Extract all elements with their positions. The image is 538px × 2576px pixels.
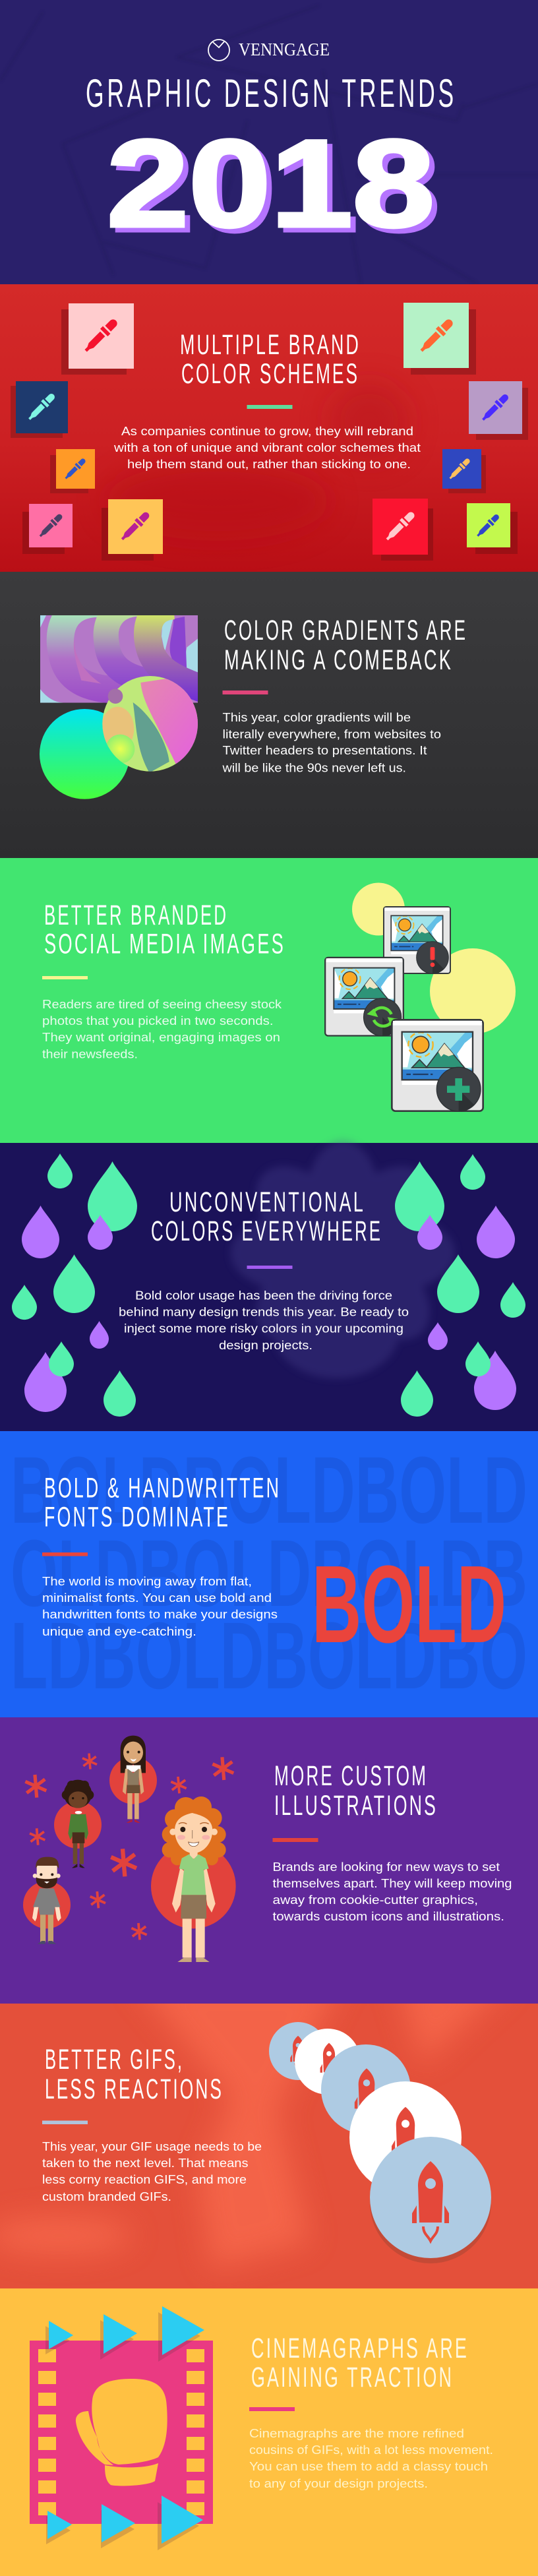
body text: cousins of GIFs, with a lot less movement. [249,2443,493,2457]
card: navy dropper [11,381,68,438]
body text [273,1860,512,1923]
heading: BOLD & HANDWRITTEN [44,1472,281,1504]
person: man with beard [23,1857,71,1944]
heading [44,1472,281,1533]
icon: play triangles [45,2306,204,2550]
card: lavender dropper [469,381,528,440]
body text: towards custom icons and illustrations. [273,1909,504,1923]
year: 2018: 2018 [107,114,434,253]
body text: with a ton of unique and vibrant color schemes that [113,441,421,454]
heading: BETTER GIFS, [45,2044,184,2075]
heading [151,1186,382,1247]
body text: minimalist fonts. You can use bold and [42,1591,272,1605]
body text: themselves apart. They will keep moving [273,1876,512,1890]
rocket circle 3 [321,2044,411,2134]
heading: MORE CUSTOM [274,1760,428,1792]
body text [42,1574,278,1638]
person: woman with long dark hair [109,1736,157,1823]
body text: This year, your GIF usage needs to be [42,2139,262,2153]
body text: less corny reaction GIFS, and more [42,2172,247,2186]
body text: You can use them to add a classy touch [249,2459,488,2473]
panel: social media images [0,858,538,1143]
body text: to any of your design projects. [249,2476,428,2490]
gradient artwork [40,603,206,799]
card: hot pink dropper [22,504,73,554]
body text: help them stand out, rather than sticking to one. [127,457,411,471]
right raindrops [395,1154,525,1417]
card: pink dropper [61,303,134,375]
rocket circle 4 [349,2081,462,2193]
card: yellow dropper [102,499,163,561]
rocket circle 5 [370,2137,491,2263]
card: mint dropper [404,303,476,375]
body text: Bold color usage has been the driving force [135,1289,392,1302]
logo: venngage [208,40,330,61]
background word pattern [11,1437,527,1709]
heading: BETTER BRANDED [44,900,228,931]
icon: photo with alert [384,907,450,973]
body text: Readers are tired of seeing cheesy stock [42,997,282,1011]
panel: cinemagraphs [0,2288,538,2576]
body text: Brands are looking for new ways to set [273,1860,500,1874]
heading: MULTIPLE BRAND [180,329,361,361]
body text: literally everywhere, from websites to [223,727,441,741]
heading: UNCONVENTIONAL [169,1186,365,1218]
body text: photos that you picked in two seconds. [42,1014,273,1027]
body text: taken to the next level. That means [42,2156,248,2170]
body text: design projects. [219,1338,313,1352]
body text [42,2139,262,2203]
body text [119,1289,409,1352]
body text: Twitter headers to presentations. It [223,743,427,757]
icon: photo with refresh [325,958,404,1036]
icon: photo with plus [392,1020,483,1111]
heading [224,615,467,676]
icon: film strip with boxing glove [30,2341,213,2524]
card: orange dropper [50,449,95,493]
body text [222,710,441,774]
section: header [0,0,538,284]
person: woman with dark curly hair [54,1780,102,1868]
panel: better gifs [0,1978,538,2288]
panel: bold fonts [0,1431,538,1717]
body text: They want original, engaging images on [42,1030,280,1044]
asterisks [25,1754,233,1940]
body text: unique and eye-catching. [42,1624,196,1638]
body text: The world is moving away from flat, [42,1574,252,1588]
panel: custom illustrations [0,1717,538,2004]
body text: their newsfeeds. [42,1047,138,1060]
card: lime dropper [467,503,518,554]
body text: will be like the 90s never left us. [222,761,406,774]
body text: This year, color gradients will be [223,710,411,724]
body text: inject some more risky colors in your upcoming [124,1322,404,1335]
body text [42,997,282,1060]
heading [180,329,361,390]
background flower [231,1141,455,1378]
heading: ILLUSTRATIONS [274,1790,438,1822]
heading: COLOR SCHEMES [181,358,359,390]
body text: Cinemagraphs are the more refined [249,2426,464,2440]
body text [113,424,421,471]
year: 2018: 2018 [112,119,440,257]
heading: COLORS EVERYWHERE [151,1215,382,1247]
heading [274,1760,438,1822]
rocket circle 1 [269,2022,327,2080]
illustration: people and asterisks [23,1736,236,1962]
heading [45,2044,224,2105]
body text: custom branded GIFs. [42,2190,171,2203]
body text: behind many design trends this year. Be ready to [119,1304,409,1319]
card: blue dropper [442,449,486,493]
heading: LESS REACTIONS [45,2073,224,2105]
heading [44,900,285,960]
panel: unconventional colors [0,1141,538,1431]
body text [249,2426,493,2490]
panel: color gradients [0,572,538,858]
card: red dropper [373,499,433,561]
rocket circle 2 [295,2029,361,2095]
body text: away from cookie-cutter graphics, [273,1893,478,1907]
logo: venngage: VENNGAGE [239,40,330,59]
body text: As companies continue to grow, they will rebrand [121,424,413,438]
person: woman with curly red hair [151,1796,236,1962]
left raindrops [12,1153,137,1417]
heading [251,2333,469,2393]
heading: SOCIAL MEDIA IMAGES [44,929,285,960]
body text: handwritten fonts to make your designs [42,1607,278,1621]
panel: multiple brand color schemes [0,284,538,572]
heading: FONTS DOMINATE [44,1501,230,1533]
